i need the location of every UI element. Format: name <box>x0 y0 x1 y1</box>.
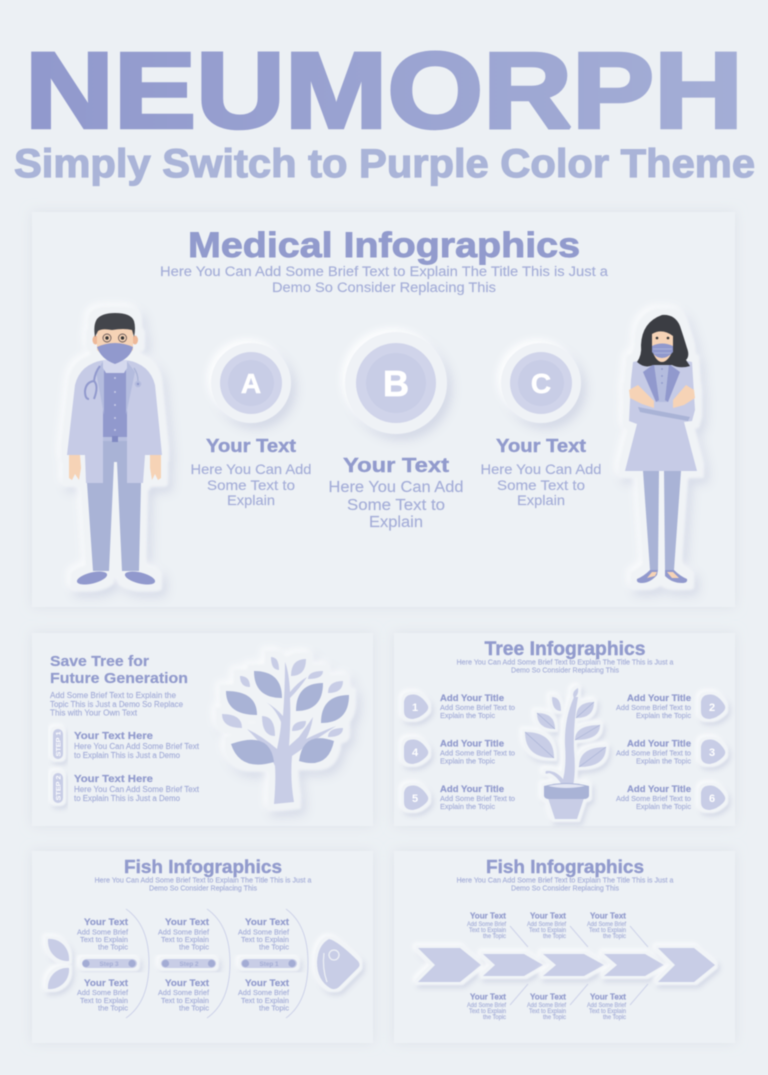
heading: medical infographics: Medical Infographics <box>188 226 580 265</box>
bottom text 3: Your Text <box>590 992 626 1002</box>
bottom text 1: Your Text <box>470 992 506 1002</box>
heading: save tree <box>50 653 188 687</box>
text 6: Explain the Topic <box>636 802 691 811</box>
step 3 bottom text <box>77 978 129 1012</box>
arc 1 <box>286 909 308 1018</box>
step 2 pill: STEP 2 <box>55 775 62 800</box>
badge 5: 5 <box>412 793 418 805</box>
heading: tree infographics: Tree Infographics <box>484 639 646 660</box>
item 2 <box>616 693 725 720</box>
label C: Your Text <box>496 436 586 456</box>
fish intro text <box>94 876 312 892</box>
save tree description: Topic This is Just a Demo So Replace <box>50 700 184 709</box>
step 2 pill <box>53 773 63 803</box>
bottom text 1: Add Some Brief <box>467 1003 506 1009</box>
connector lines <box>510 926 648 1005</box>
arrow 5 <box>658 948 715 982</box>
step 2 top text: Your Text <box>165 917 210 928</box>
panel: save tree <box>32 633 373 826</box>
text 3: Add Your Title <box>627 738 691 748</box>
panel: fish infographics steps <box>32 851 373 1043</box>
fish intro text: Demo So Consider Replacing This <box>149 884 257 892</box>
step 1 top text <box>238 917 290 952</box>
step 2 text: to Explain This is Just a Demo <box>74 794 181 803</box>
step 1 text <box>74 730 200 760</box>
top text 3: the Topic <box>603 934 626 940</box>
step 2 bottom text: the Topic <box>179 1004 209 1012</box>
description C <box>480 461 602 508</box>
bottom text 2: Add Some Brief <box>527 1003 566 1009</box>
item 4 <box>404 738 515 766</box>
text 2 <box>616 693 691 720</box>
step 3 bottom text: the Topic <box>98 1004 128 1012</box>
step 3 pill: Step 3 <box>100 961 119 968</box>
icon: fish tail <box>48 939 69 989</box>
top text 2: the Topic <box>543 934 566 940</box>
step 2 top text: the Topic <box>179 942 209 952</box>
tree intro text: Demo So Consider Replacing This <box>511 666 619 674</box>
panel: fish infographics arrows <box>394 851 735 1043</box>
step 1 pill: STEP 1 <box>55 731 62 756</box>
description B <box>328 479 464 531</box>
item 1 <box>404 693 515 720</box>
step 1 column <box>238 909 308 1018</box>
description A: Here You Can Add <box>190 461 312 477</box>
bottom text 3: the Topic <box>603 1015 626 1021</box>
text 5: Add Your Title <box>440 784 504 794</box>
badge 4: 4 <box>412 747 419 759</box>
step 1 top text: Text to Explain <box>241 935 289 944</box>
text 6: Add Some Brief Text to <box>616 794 691 803</box>
item 6 <box>616 784 725 811</box>
step 1 top text: Add Some Brief <box>238 928 290 936</box>
medical intro text: Demo So Consider Replacing This <box>272 280 496 295</box>
arrow 2 <box>483 954 543 976</box>
step 1 bottom text: Text to Explain <box>241 996 289 1005</box>
description C: Here You Can Add <box>480 461 602 477</box>
title: NEUMORPH <box>25 30 743 150</box>
text 3 <box>616 738 691 766</box>
top text 3: Text to Explain <box>589 928 626 934</box>
item 3 <box>616 738 725 766</box>
step 3 top text: the Topic <box>98 942 128 952</box>
step 2 top text <box>158 917 210 952</box>
text 3: Explain the Topic <box>636 756 691 766</box>
step 2 top text: Add Some Brief <box>158 928 210 936</box>
text 6: Add Your Title <box>627 784 691 794</box>
fish intro text <box>456 876 674 892</box>
description C: Explain <box>517 492 565 508</box>
top text 2 <box>527 912 566 940</box>
bottom text 2: Your Text <box>530 992 566 1002</box>
item 5 <box>404 784 515 811</box>
badge B: B <box>383 363 409 404</box>
bottom text 3: Text to Explain <box>589 1009 626 1015</box>
step 3 bottom text: Your Text <box>84 978 129 989</box>
description B: Here You Can Add <box>328 479 464 496</box>
step 2 pill: Step 2 <box>180 961 199 968</box>
arrow chain <box>418 948 715 982</box>
step 3 top text: Your Text <box>84 917 129 928</box>
step 2 text <box>74 773 200 803</box>
step 1 bottom text <box>238 978 290 1012</box>
top text 3 <box>587 912 626 940</box>
text 3: Add Some Brief Text to <box>616 748 691 758</box>
illustration: potted plant <box>525 688 606 819</box>
badge 6: 6 <box>709 793 715 805</box>
bottom text 2: the Topic <box>543 1015 566 1021</box>
subtitle: Simply Switch to Purple Color Theme <box>14 142 755 186</box>
item C <box>480 343 602 508</box>
badge 1: 1 <box>412 702 418 714</box>
description A: Explain <box>227 492 275 508</box>
step 3 top text: Text to Explain <box>80 935 128 944</box>
top text 1: the Topic <box>483 934 506 940</box>
step 1 top text: the Topic <box>259 942 289 952</box>
step 1 top text: Your Text <box>245 917 290 928</box>
top text 1: Your Text <box>470 912 506 920</box>
text 5 <box>440 784 515 811</box>
heading: fish infographics: Fish Infographics <box>486 856 644 877</box>
top text 2: Your Text <box>530 912 566 920</box>
fish intro text: Demo So Consider Replacing This <box>511 884 619 892</box>
badge C: C <box>531 368 551 399</box>
top text 3: Add Some Brief <box>587 922 626 928</box>
step 2 text: Your Text Here <box>74 773 153 785</box>
arrow 4 <box>604 954 664 976</box>
medical intro text <box>160 264 609 295</box>
badge 3: 3 <box>709 747 715 759</box>
heading: save tree: Save Tree for <box>50 653 149 670</box>
text 2: Explain the Topic <box>636 711 691 720</box>
badge A <box>211 343 291 423</box>
item B <box>328 332 464 531</box>
illustration: doctor <box>67 313 162 587</box>
step 1 text: Here You Can Add Some Brief Text <box>74 742 200 751</box>
step 2 bottom text: Add Some Brief <box>158 988 210 997</box>
description A: Some Text to <box>207 477 295 493</box>
step 3 bottom text: Add Some Brief <box>77 988 129 997</box>
badge B <box>345 332 447 434</box>
save tree description: Add Some Brief Text to Explain the <box>50 691 177 700</box>
step 3 top text: Add Some Brief <box>77 928 129 936</box>
text 1 <box>440 693 515 720</box>
item A <box>190 343 312 508</box>
tree intro text: Here You Can Add Some Brief Text to Explain The Title This is Just a <box>456 658 674 666</box>
bottom text 1 <box>467 992 506 1021</box>
heading: save tree: Future Generation <box>50 670 188 687</box>
step 1 text: to Explain This is Just a Demo <box>74 751 181 760</box>
step 3 bottom text: Text to Explain <box>80 996 128 1005</box>
text 1: Explain the Topic <box>440 711 495 720</box>
step 1 pill: Step 1 <box>260 961 279 968</box>
badge A: A <box>241 368 261 399</box>
description C: Some Text to <box>497 477 585 493</box>
step 1 pill <box>53 729 63 759</box>
bottom text 2 <box>527 992 566 1021</box>
text 1: Add Your Title <box>440 693 504 703</box>
top text 1: Add Some Brief <box>467 922 506 928</box>
panel: medical infographics <box>32 212 735 607</box>
step 2 top text: Text to Explain <box>161 935 209 944</box>
top text 3: Your Text <box>590 912 626 920</box>
bottom text 1: the Topic <box>483 1015 506 1021</box>
top text 1: Text to Explain <box>469 928 506 934</box>
tree intro text <box>456 658 674 674</box>
text 2: Add Some Brief Text to <box>616 703 691 712</box>
text 5: Add Some Brief Text to <box>440 794 515 803</box>
text 4: Add Your Title <box>440 738 504 748</box>
bottom text 2: Text to Explain <box>529 1009 566 1015</box>
text 5: Explain the Topic <box>440 802 495 811</box>
badge C <box>501 343 581 423</box>
step 2 bottom text: Text to Explain <box>161 996 209 1005</box>
step 1 bottom text: Your Text <box>245 978 290 989</box>
medical intro text: Here You Can Add Some Brief Text to Explain The Title This is Just a <box>160 264 609 279</box>
arc 2 <box>207 909 230 1018</box>
icon: fish head <box>317 939 360 989</box>
top text 2: Add Some Brief <box>527 922 566 928</box>
step 2 bottom text: Your Text <box>165 978 210 989</box>
badge 2: 2 <box>709 702 715 714</box>
step 3 column <box>77 909 149 1018</box>
arrow 3 <box>543 954 604 976</box>
heading: fish infographics: Fish Infographics <box>124 856 282 877</box>
text 2: Add Your Title <box>627 693 691 703</box>
description B: Some Text to <box>347 497 445 514</box>
step 1 bottom text: the Topic <box>259 1004 289 1012</box>
text 4: Explain the Topic <box>440 756 495 766</box>
save tree description: This with Your Own Text <box>50 708 138 718</box>
step 2 bottom text <box>158 978 210 1012</box>
bottom text 3: Add Some Brief <box>587 1003 626 1009</box>
illustration: tree <box>222 657 349 804</box>
bottom text 3 <box>587 992 626 1021</box>
text 4: Add Some Brief Text to <box>440 748 515 758</box>
arrow 1 <box>418 948 481 982</box>
step 2 text: Here You Can Add Some Brief Text <box>74 785 200 794</box>
panel: tree infographics <box>394 633 735 826</box>
step 2 column <box>158 909 230 1018</box>
description A <box>190 461 312 508</box>
fish intro text: Here You Can Add Some Brief Text to Explain The Title This is Just a <box>94 876 312 884</box>
top text 2: Text to Explain <box>529 928 566 934</box>
bottom text 1: Text to Explain <box>469 1009 506 1015</box>
step 1 bottom text: Add Some Brief <box>238 988 290 997</box>
text 4 <box>440 738 515 766</box>
arc 3 <box>126 909 149 1018</box>
label A: Your Text <box>206 436 296 456</box>
text 1: Add Some Brief Text to <box>440 703 515 712</box>
illustration: woman <box>625 315 697 583</box>
top text 1 <box>467 912 506 940</box>
save tree description <box>50 691 184 718</box>
label B: Your Text <box>343 455 449 477</box>
fish intro text: Here You Can Add Some Brief Text to Explain The Title This is Just a <box>456 876 674 884</box>
step 3 top text <box>77 917 129 952</box>
text 6 <box>616 784 691 811</box>
description B: Explain <box>369 514 423 531</box>
step 1 text: Your Text Here <box>74 730 153 742</box>
